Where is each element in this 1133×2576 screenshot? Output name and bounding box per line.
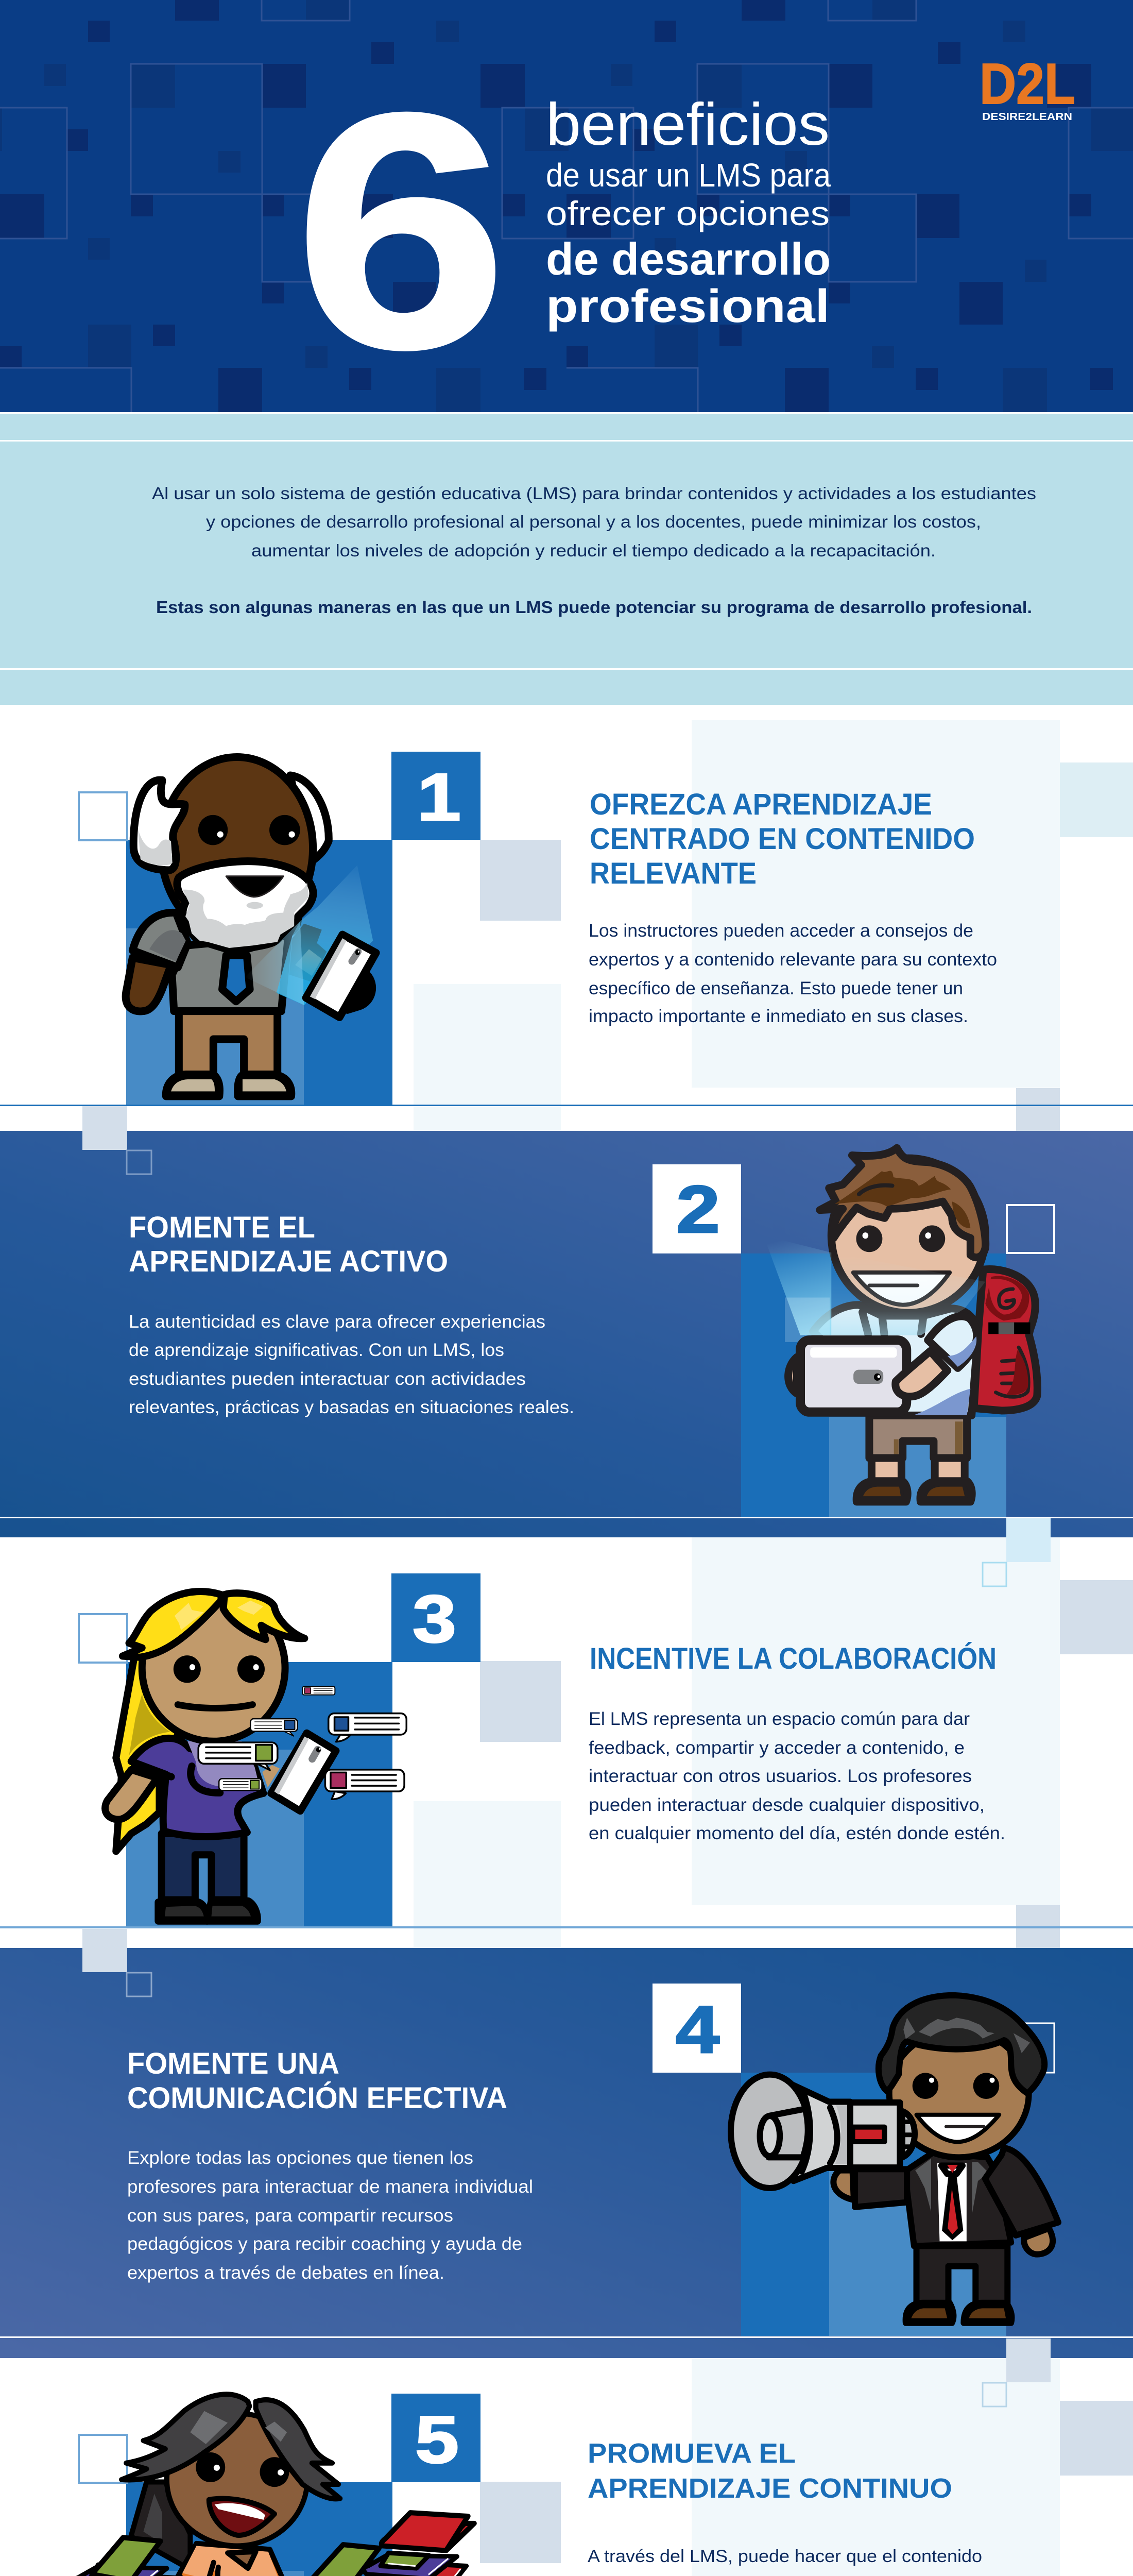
body text: pueden interactuar desde cualquier dispositivo, bbox=[589, 1795, 985, 1815]
character: man in suit with megaphone bbox=[731, 1995, 1058, 2323]
body text: estudiantes pueden interactuar con actividades bbox=[129, 1369, 526, 1389]
body text bbox=[588, 2547, 982, 2576]
character: student with tablet and backpack bbox=[764, 1148, 1037, 1502]
number 4: 4 bbox=[676, 1992, 719, 2067]
title text bbox=[546, 91, 831, 332]
heading: FOMENTE UNA bbox=[127, 2047, 339, 2080]
character: woman with phone and chat bubbles bbox=[105, 1591, 406, 1921]
heading: INCENTIVE LA COLABORACIÓN bbox=[590, 1642, 997, 1675]
body text: pedagógicos y para recibir coaching y ayuda de bbox=[127, 2234, 522, 2254]
title text: beneficios bbox=[546, 91, 830, 158]
intro text: Al usar un solo sistema de gestión educativa (LMS) para brindar contenidos y actividades a los estudiantes bbox=[152, 484, 1036, 503]
body text: Explore todas las opciones que tienen los bbox=[127, 2148, 473, 2168]
body text: de aprendizaje significativas. Con un LMS, los bbox=[129, 1340, 504, 1360]
body text: A través del LMS, puede hacer que el contenido bbox=[588, 2547, 982, 2566]
title: big number six: 6 bbox=[294, 44, 508, 418]
heading bbox=[129, 1211, 448, 1278]
number 5 bbox=[391, 2394, 480, 2482]
body text: interactuar con otros usuarios. Los profesores bbox=[589, 1766, 972, 1786]
intro text bbox=[152, 484, 1036, 617]
heading: APRENDIZAJE ACTIVO bbox=[129, 1245, 448, 1278]
number 1 bbox=[391, 752, 480, 840]
logo: D2L Desire2Learn: D2L bbox=[980, 52, 1075, 116]
body text: expertos a través de debates en línea. bbox=[127, 2263, 444, 2283]
panel: benefit 5 bbox=[0, 2338, 1133, 2576]
body text: impacto importante e inmediato en sus clases. bbox=[589, 1006, 968, 1026]
intro text: y opciones de desarrollo profesional al personal y a los docentes, puede minimizar los costos, bbox=[206, 512, 981, 531]
body text: expertos y a contenido relevante para su contexto bbox=[589, 950, 997, 970]
body text: feedback, compartir y acceder a contenido, e bbox=[589, 1738, 965, 1758]
heading bbox=[588, 2438, 952, 2504]
panel: benefit 4 bbox=[0, 1929, 1133, 2358]
number 3: 3 bbox=[413, 1581, 456, 1656]
intro text: Estas son algunas maneras en las que un LMS puede potenciar su programa de desarrollo profesional. bbox=[156, 598, 1032, 617]
body text: La autenticidad es clave para ofrecer experiencias bbox=[129, 1312, 545, 1332]
number 1: 1 bbox=[417, 759, 461, 835]
body text bbox=[589, 921, 997, 1026]
character: woman at desk with stacks of books bbox=[27, 2394, 479, 2576]
body text: específico de enseñanza. Esto puede tener un bbox=[589, 978, 963, 998]
body text bbox=[589, 1709, 1005, 1843]
number 2 bbox=[653, 1164, 741, 1253]
number 4 bbox=[653, 1984, 741, 2073]
panel: intro band bbox=[0, 414, 1133, 705]
heading: COMUNICACIÓN EFECTIVA bbox=[127, 2081, 507, 2115]
title text: ofrecer opciones bbox=[546, 194, 830, 232]
heading: OFREZCA APRENDIZAJE bbox=[590, 788, 932, 821]
title text: de usar un LMS para bbox=[546, 157, 831, 194]
body text: en cualquier momento del día, estén donde estén. bbox=[589, 1823, 1005, 1843]
body text: relevantes, prácticas y basadas en situaciones reales. bbox=[129, 1397, 574, 1417]
heading: APRENDIZAJE CONTINUO bbox=[588, 2473, 952, 2504]
body text: profesores para interactuar de manera individual bbox=[127, 2177, 533, 2197]
heading: FOMENTE EL bbox=[129, 1211, 315, 1244]
body text: con sus pares, para compartir recursos bbox=[127, 2206, 453, 2226]
number 5: 5 bbox=[415, 2402, 459, 2477]
number 2: 2 bbox=[676, 1172, 720, 1247]
title text: de desarrollo bbox=[546, 233, 831, 284]
body text bbox=[127, 2148, 533, 2283]
logo: D2L Desire2Learn: DESIRE2LEARN bbox=[982, 111, 1072, 123]
character: bearded professor with phone bbox=[126, 757, 376, 1096]
body text: Los instructores pueden acceder a consejos de bbox=[589, 921, 973, 941]
heading: CENTRADO EN CONTENIDO bbox=[590, 822, 975, 856]
body text: El LMS representa un espacio común para dar bbox=[589, 1709, 970, 1729]
heading: RELEVANTE bbox=[590, 857, 757, 890]
heading bbox=[127, 2047, 507, 2115]
heading: PROMUEVA EL bbox=[588, 2438, 796, 2469]
title text: profesional bbox=[546, 281, 830, 332]
number 3 bbox=[391, 1573, 480, 1662]
intro text: aumentar los niveles de adopción y reducir el tiempo dedicado a la recapacitación. bbox=[251, 541, 936, 560]
panel: benefit 1 bbox=[0, 720, 1133, 1131]
body text bbox=[129, 1312, 574, 1417]
heading bbox=[590, 788, 975, 890]
panel: benefit 2 bbox=[0, 1106, 1133, 1537]
panel: benefit 3 bbox=[0, 1518, 1133, 1948]
panel: header bbox=[0, 0, 1133, 418]
